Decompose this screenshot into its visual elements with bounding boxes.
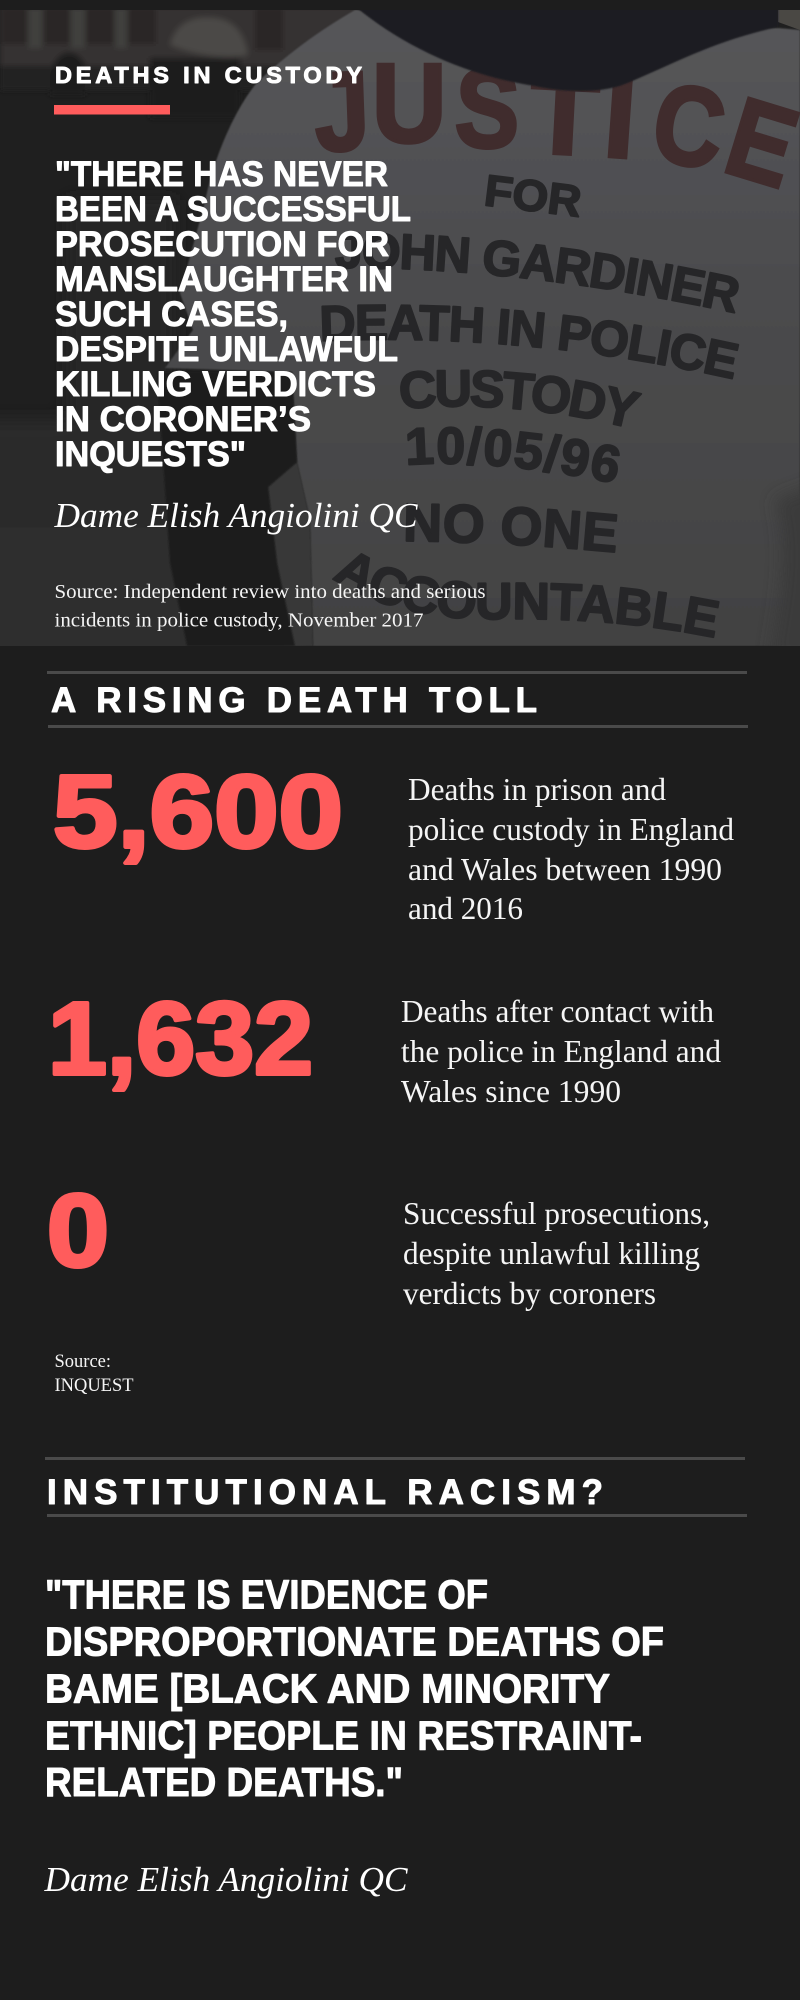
description: the police in England and (401, 1033, 721, 1069)
quote: no successful prosecution: SUCH CASES, (55, 295, 288, 334)
shirt lettering: accountable: ACCOUNTABLE (332, 553, 720, 638)
panel: a rising death toll (47, 671, 748, 1396)
photo: hood collar (357, 8, 778, 91)
accent bar (54, 105, 170, 114)
shirt lettering: no one: NO ONE (406, 502, 618, 553)
photo: right shirt shadow (780, 494, 800, 646)
shirt lettering: custody: CUSTODY (400, 370, 642, 427)
description: Deaths in prison and (408, 771, 666, 807)
photo: top right background (778, 10, 800, 30)
quote: no successful prosecution: DESPITE UNLAWFUL (55, 330, 398, 369)
quote: disproportionate deaths: "THERE IS EVIDENCE OF (45, 1572, 488, 1618)
description (408, 771, 734, 926)
shirt lettering: JUSTICE: J (313, 49, 372, 175)
source note: Source: Independent review into deaths and serious (54, 581, 486, 603)
source note: INQUEST (54, 1376, 134, 1396)
photo: dark coat (157, 372, 297, 646)
attribution: Dame Elish Angiolini QC (43, 1860, 408, 1899)
quote: disproportionate deaths: ETHNIC] PEOPLE IN RESTRAINT- (45, 1712, 642, 1758)
number: 1,632 (48, 981, 313, 1096)
shirt lettering: death in police: DEATH IN POLICE (321, 304, 740, 380)
attribution: Dame Elish Angiolini QC (53, 496, 418, 535)
description: and Wales between 1990 (408, 851, 722, 887)
stat: 0 (47, 1173, 710, 1311)
photo: building and crowd behind (0, 10, 356, 69)
description (401, 993, 721, 1109)
quote: disproportionate deaths: BAME [BLACK AND MINORITY (45, 1666, 610, 1712)
source note (54, 1352, 134, 1396)
source note: Source: (54, 1352, 111, 1372)
quote: no successful prosecution: "THERE HAS NEVER (55, 155, 388, 194)
shirt lettering: for: FOR (482, 166, 584, 227)
photo: t-shirt edge band (268, 462, 313, 646)
shirt lettering: date: 10/05/96 (407, 426, 620, 482)
shirt lettering: JUSTICE: C (644, 59, 734, 194)
photo: pavement (0, 210, 187, 646)
section rule bottom (48, 725, 748, 728)
shirt lettering: JUSTICE: S (453, 45, 522, 173)
description: despite unlawful killing (403, 1235, 700, 1271)
description: and 2016 (408, 890, 523, 926)
quote: disproportionate deaths: RELATED DEATHS." (45, 1759, 403, 1805)
quote: no successful prosecution (55, 155, 411, 474)
heading: institutional racism: INSTITUTIONAL RACISM? (47, 1473, 603, 1512)
panel: header photo with quote (0, 10, 800, 646)
stat: 1,632 (48, 981, 721, 1109)
description: police custody in England (408, 811, 734, 847)
quote: no successful prosecution: IN CORONER’S (55, 400, 311, 439)
number: 5,600 (53, 754, 343, 869)
description (403, 1195, 710, 1311)
quote: no successful prosecution: BEEN A SUCCESSFUL (55, 190, 411, 229)
shirt lettering: JUSTICE: U (372, 41, 446, 166)
description: Deaths after contact with (401, 993, 714, 1029)
section rule bottom (47, 1514, 747, 1517)
section rule top (45, 1457, 745, 1460)
section rule top (47, 671, 747, 674)
quote: no successful prosecution: KILLING VERDICTS (55, 365, 376, 404)
photo: t-shirt (165, 10, 800, 646)
shirt lettering: JUSTICE: T (527, 51, 602, 180)
quote: disproportionate deaths: DISPROPORTIONATE DEATHS OF (45, 1618, 664, 1664)
description: verdicts by coroners (403, 1275, 656, 1311)
panel: institutional racism (43, 1457, 747, 1899)
shirt lettering: JUSTICE (315, 62, 800, 190)
quote: disproportionate deaths (45, 1572, 664, 1805)
quote: no successful prosecution: MANSLAUGHTER IN (55, 260, 393, 299)
number: 0 (47, 1173, 109, 1288)
stat: 5,600 (53, 754, 734, 926)
shirt lettering: JUSTICE: I (600, 55, 640, 182)
source note (54, 581, 486, 632)
shirt lettering: John Gardiner: JOHN GARDINER (334, 232, 739, 314)
source note: incidents in police custody, November 2017 (54, 610, 423, 632)
background photo: protester in Justice t-shirt (0, 10, 800, 646)
heading: deaths in custody: DEATHS IN CUSTODY (55, 62, 362, 88)
quote: no successful prosecution: INQUESTS" (55, 435, 246, 474)
quote: no successful prosecution: PROSECUTION FOR (55, 225, 389, 264)
heading: a rising death toll: A RISING DEATH TOLL (51, 681, 537, 720)
description: Successful prosecutions, (403, 1195, 710, 1231)
description: Wales since 1990 (401, 1073, 621, 1109)
